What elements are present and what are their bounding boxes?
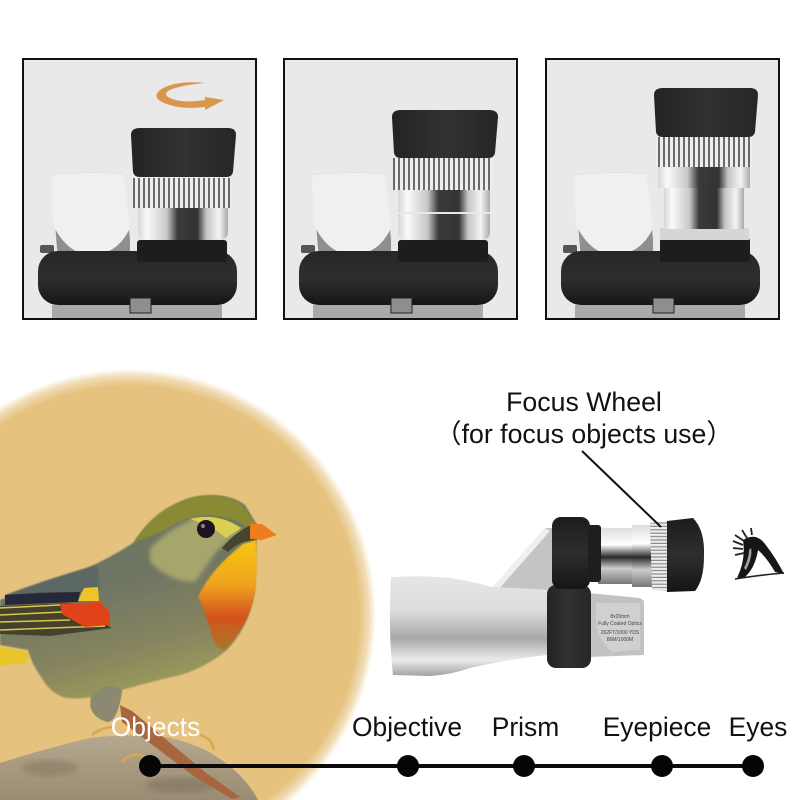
prism block — [588, 593, 644, 657]
breast — [198, 540, 257, 650]
eyecup — [131, 128, 236, 177]
wing dark — [5, 592, 80, 605]
wing shoulder — [5, 565, 100, 597]
node: eyes — [742, 755, 764, 777]
eyecup — [392, 110, 498, 158]
base screw — [563, 245, 577, 253]
node: objects — [139, 755, 161, 777]
chrome eyepiece — [598, 528, 634, 584]
base screw — [40, 245, 54, 253]
knurled wheel — [393, 158, 493, 190]
main scope — [390, 517, 704, 676]
body — [0, 495, 257, 722]
prism label: Fully Coated Optics — [598, 621, 642, 627]
prism label — [596, 603, 642, 652]
toes — [92, 727, 214, 762]
prism label: 262FT/1000 YDS — [601, 630, 640, 636]
label: eyes: Eyes — [729, 712, 787, 742]
label: focus wheel: Focus Wheel — [506, 387, 662, 417]
cheek — [150, 518, 245, 582]
label: focus wheel purpose: （for focus objects use） — [435, 419, 733, 449]
chrome barrel upper — [658, 167, 750, 188]
lower silver tube — [313, 305, 483, 318]
knurled wheel — [656, 137, 752, 167]
diagonal prism housing — [492, 528, 556, 600]
clip — [653, 298, 674, 313]
black ring — [660, 238, 750, 262]
head cap — [135, 495, 256, 542]
chrome barrel lower — [664, 187, 744, 229]
rock — [0, 735, 258, 800]
node: prism — [513, 755, 535, 777]
prism label: 8x20mm — [610, 614, 630, 620]
timeline — [139, 755, 764, 777]
panel: focus position 3 — [546, 59, 779, 319]
label: eyepiece: Eyepiece — [603, 712, 711, 742]
wing feathers — [0, 603, 112, 636]
clip — [391, 298, 412, 313]
label: objects: Objects — [111, 712, 200, 742]
leg — [120, 705, 240, 799]
chrome barrel — [138, 208, 228, 240]
icon: eye — [733, 528, 784, 579]
beak — [250, 524, 277, 540]
tail yellow — [0, 648, 30, 666]
clip — [130, 298, 151, 313]
icon: rotation arrow — [156, 82, 224, 110]
node: objective — [397, 755, 419, 777]
eye stripe — [190, 517, 241, 538]
eyecup — [667, 518, 704, 592]
upper black ring — [552, 517, 590, 589]
silver block — [51, 173, 130, 260]
glow circle — [0, 369, 376, 800]
node: eyepiece — [651, 755, 673, 777]
black ring — [137, 240, 227, 262]
bird — [0, 495, 277, 799]
lower silver tube — [52, 305, 222, 318]
lower black ring — [547, 585, 591, 668]
objective body — [390, 576, 552, 676]
base screw — [301, 245, 315, 253]
base collar — [561, 251, 760, 305]
chrome flange — [660, 228, 749, 240]
panel: focus position 1 — [23, 59, 256, 319]
base collar — [299, 251, 498, 305]
prism label: 86M/1000M — [607, 637, 633, 643]
knurled wheel — [132, 178, 231, 208]
wing yellow patch — [78, 587, 99, 601]
arrow: focus wheel leader line — [582, 451, 661, 527]
panel: focus position 2 — [284, 59, 517, 319]
label: objective: Objective — [352, 712, 462, 742]
base collar — [38, 251, 237, 305]
thigh — [90, 686, 122, 722]
silver block — [312, 173, 391, 260]
black ring — [398, 240, 488, 262]
silver block — [574, 173, 653, 260]
label: prism: Prism — [492, 712, 559, 742]
chrome barrel — [398, 190, 490, 240]
wing red patch — [60, 602, 110, 627]
knurled wheel — [650, 521, 670, 591]
eyecup — [654, 88, 758, 137]
eye — [197, 520, 215, 538]
lower silver tube — [575, 305, 745, 318]
throat mark — [222, 524, 257, 552]
